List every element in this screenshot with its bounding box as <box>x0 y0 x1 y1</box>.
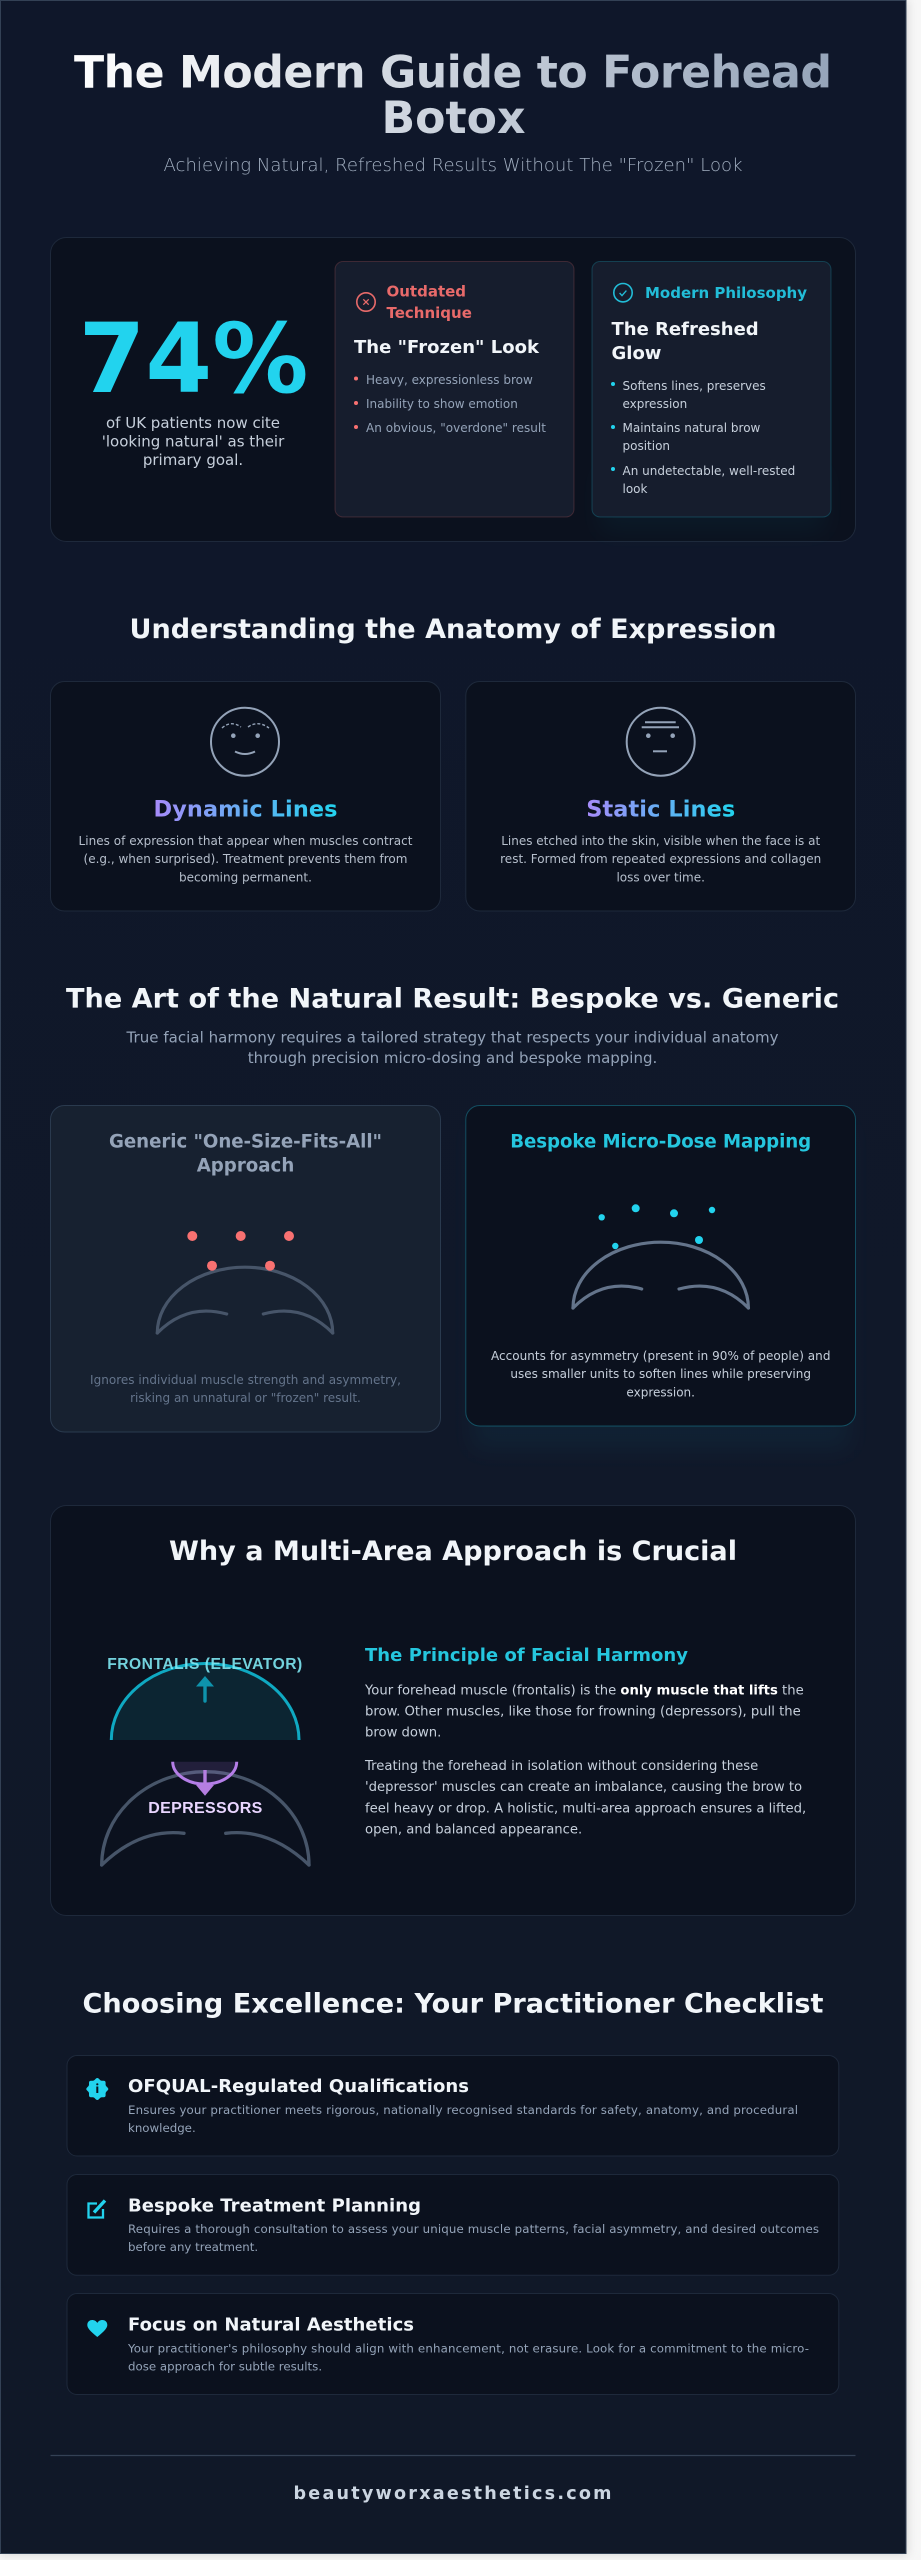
diagram: elevator and depressor muscles <box>102 1656 309 1865</box>
icon: expressive face <box>211 708 279 776</box>
arrow: pull down <box>196 1770 214 1796</box>
card heading: Dynamic Lines <box>154 797 338 823</box>
card heading: Approach <box>197 1156 294 1177</box>
forehead outline <box>102 1772 309 1865</box>
card label: Outdated <box>386 282 466 300</box>
icon: cross in circle <box>357 293 375 311</box>
checklist item: qualifications <box>67 2056 839 2156</box>
item description: before any treatment. <box>128 2240 258 2254</box>
explanation paragraph one: brow. Other muscles, like those for frowning (depressors), pull the <box>365 1705 801 1720</box>
panel: multi-area approach <box>50 1506 856 1916</box>
panel: hero statistic and comparison <box>50 238 856 542</box>
statistic caption: 'looking natural' as their <box>102 432 285 450</box>
title: Botox <box>381 93 526 144</box>
statistic caption <box>102 414 285 469</box>
glow behind modern card <box>600 470 825 532</box>
card description: uses smaller units to soften lines while preserving <box>510 1367 811 1381</box>
panel: dynamic lines <box>50 682 440 911</box>
item description: knowledge. <box>128 2121 196 2135</box>
panel: static lines <box>466 682 856 911</box>
section intro text: True facial harmony requires a tailored strategy that respects your individual anatomy <box>126 1029 779 1047</box>
card label: Modern Philosophy <box>645 284 807 302</box>
glow behind bespoke card <box>472 1125 850 1450</box>
card description <box>90 1373 401 1405</box>
card heading: The "Frozen" Look <box>354 337 540 358</box>
icon: badge <box>86 2077 109 2101</box>
heading: anatomy of expression: Understanding the Anatomy of Expression <box>130 614 776 645</box>
bullet list: look <box>622 482 648 496</box>
bullet list: Inability to show emotion <box>366 397 518 411</box>
card description: expression. <box>626 1385 695 1399</box>
card heading <box>612 319 759 364</box>
bullet list: position <box>622 439 670 453</box>
card description <box>491 1349 830 1399</box>
explanation paragraph one <box>364 1683 804 1741</box>
explanation paragraph two: feel heavy or drop. A holistic, multi-area approach ensures a lifted, <box>365 1801 806 1816</box>
bullet list: An undetectable, well-rested <box>622 464 795 478</box>
explanation paragraph two: open, and balanced appearance. <box>365 1822 582 1837</box>
card description <box>500 834 821 884</box>
panel heading: Why a Multi-Area Approach is Crucial <box>169 1536 737 1567</box>
statistic caption: of UK patients now cite <box>106 414 280 432</box>
section intro text <box>126 1029 779 1067</box>
item description: Ensures your practitioner meets rigorous, nationally recognised standards for safety, anatomy, and procedural <box>128 2103 798 2117</box>
statistic caption: primary goal. <box>143 451 243 469</box>
checklist item: natural aesthetics <box>67 2294 839 2394</box>
diagram: micro-dose points <box>573 1204 748 1308</box>
bullet list <box>354 373 546 435</box>
title <box>74 48 832 144</box>
bullet list: Softens lines, preserves <box>622 379 766 393</box>
item title: Focus on Natural Aesthetics <box>128 2314 414 2336</box>
depressor muscle <box>173 1762 237 1784</box>
icon: check in circle <box>614 284 632 302</box>
checklist item: treatment planning <box>67 2174 839 2275</box>
item title: OFQUAL-Regulated Qualifications <box>128 2076 469 2097</box>
card description: rest. Formed from repeated expressions and collagen <box>500 852 821 866</box>
statistic: 74%: 74% <box>79 303 308 415</box>
card description: risking an unnatural or "frozen" result. <box>130 1391 361 1405</box>
item description <box>128 2103 798 2135</box>
explanation paragraph one: brow down. <box>365 1726 441 1741</box>
bullet list: Heavy, expressionless brow <box>366 373 533 387</box>
explanation paragraph two <box>364 1759 806 1837</box>
subtitle: Achieving Natural, Refreshed Results Without The "Frozen" Look <box>164 155 742 176</box>
card heading: Static Lines <box>586 797 735 823</box>
card label <box>386 282 472 322</box>
item title: Bespoke Treatment Planning <box>128 2195 421 2216</box>
item description: dose approach for subtle results. <box>128 2360 322 2374</box>
bullet list: expression <box>622 397 687 411</box>
section intro text: through precision micro-dosing and bespoke mapping. <box>248 1049 657 1067</box>
card heading: Bespoke Micro-Dose Mapping <box>510 1132 811 1153</box>
card heading: Generic "One-Size-Fits-All" <box>109 1132 382 1153</box>
icon: neutral face <box>627 708 695 776</box>
arrow: lift up <box>196 1676 214 1701</box>
item description: Your practitioner's philosophy should align with enhancement, not erasure. Look for a commitment to the micro- <box>127 2342 809 2356</box>
heading: practitioner checklist: Choosing Excellence: Your Practitioner Checklist <box>82 1988 824 2019</box>
label: frontalis: FRONTALIS (ELEVATOR) <box>107 1656 302 1673</box>
footer website: beautyworxaesthetics.com <box>294 2484 612 2504</box>
panel: generic approach <box>50 1106 440 1432</box>
card heading: The Refreshed <box>612 319 759 340</box>
item description <box>128 2222 819 2254</box>
card: outdated technique <box>335 262 574 517</box>
explanation paragraph two: 'depressor' muscles can create an imbalance, causing the brow to <box>365 1780 802 1795</box>
card description: (e.g., when surprised). Treatment prevents them from <box>84 852 407 866</box>
diagram: uniform injection points <box>157 1231 333 1333</box>
card label: Technique <box>386 304 472 322</box>
card description: becoming permanent. <box>179 870 312 884</box>
icon: heart <box>87 2320 107 2337</box>
title: The Modern Guide to Forehead <box>74 48 832 98</box>
card description: loss over time. <box>616 870 705 884</box>
frontalis muscle dome <box>111 1664 299 1740</box>
heading: bespoke vs generic: The Art of the Natural Result: Bespoke vs. Generic <box>66 984 839 1015</box>
card description <box>78 834 413 884</box>
bullet list: Maintains natural brow <box>622 421 761 435</box>
card description: Lines of expression that appear when muscles contract <box>78 834 413 848</box>
item description <box>127 2342 809 2374</box>
bullet list <box>611 379 795 496</box>
explanation paragraph one: Your forehead muscle (frontalis) is the only muscle that lifts the <box>364 1683 804 1698</box>
card description: Lines etched into the skin, visible when the face is at <box>501 834 820 848</box>
card heading <box>109 1132 382 1177</box>
card heading: Glow <box>612 343 661 364</box>
explanation paragraph two: Treating the forehead in isolation without considering these <box>364 1759 758 1774</box>
subheading: The Principle of Facial Harmony <box>365 1645 688 1666</box>
item description: Requires a thorough consultation to assess your unique muscle patterns, facial asymmetry, and desired outcomes <box>128 2222 819 2236</box>
card: modern philosophy <box>592 262 831 517</box>
bullet list: An obvious, "overdone" result <box>366 421 546 435</box>
card description: Ignores individual muscle strength and asymmetry, <box>90 1373 401 1387</box>
label: depressors: DEPRESSORS <box>148 1800 263 1817</box>
card description: Accounts for asymmetry (present in 90% of people) and <box>491 1349 830 1363</box>
panel: bespoke mapping <box>466 1106 856 1426</box>
icon: edit <box>88 2200 105 2218</box>
